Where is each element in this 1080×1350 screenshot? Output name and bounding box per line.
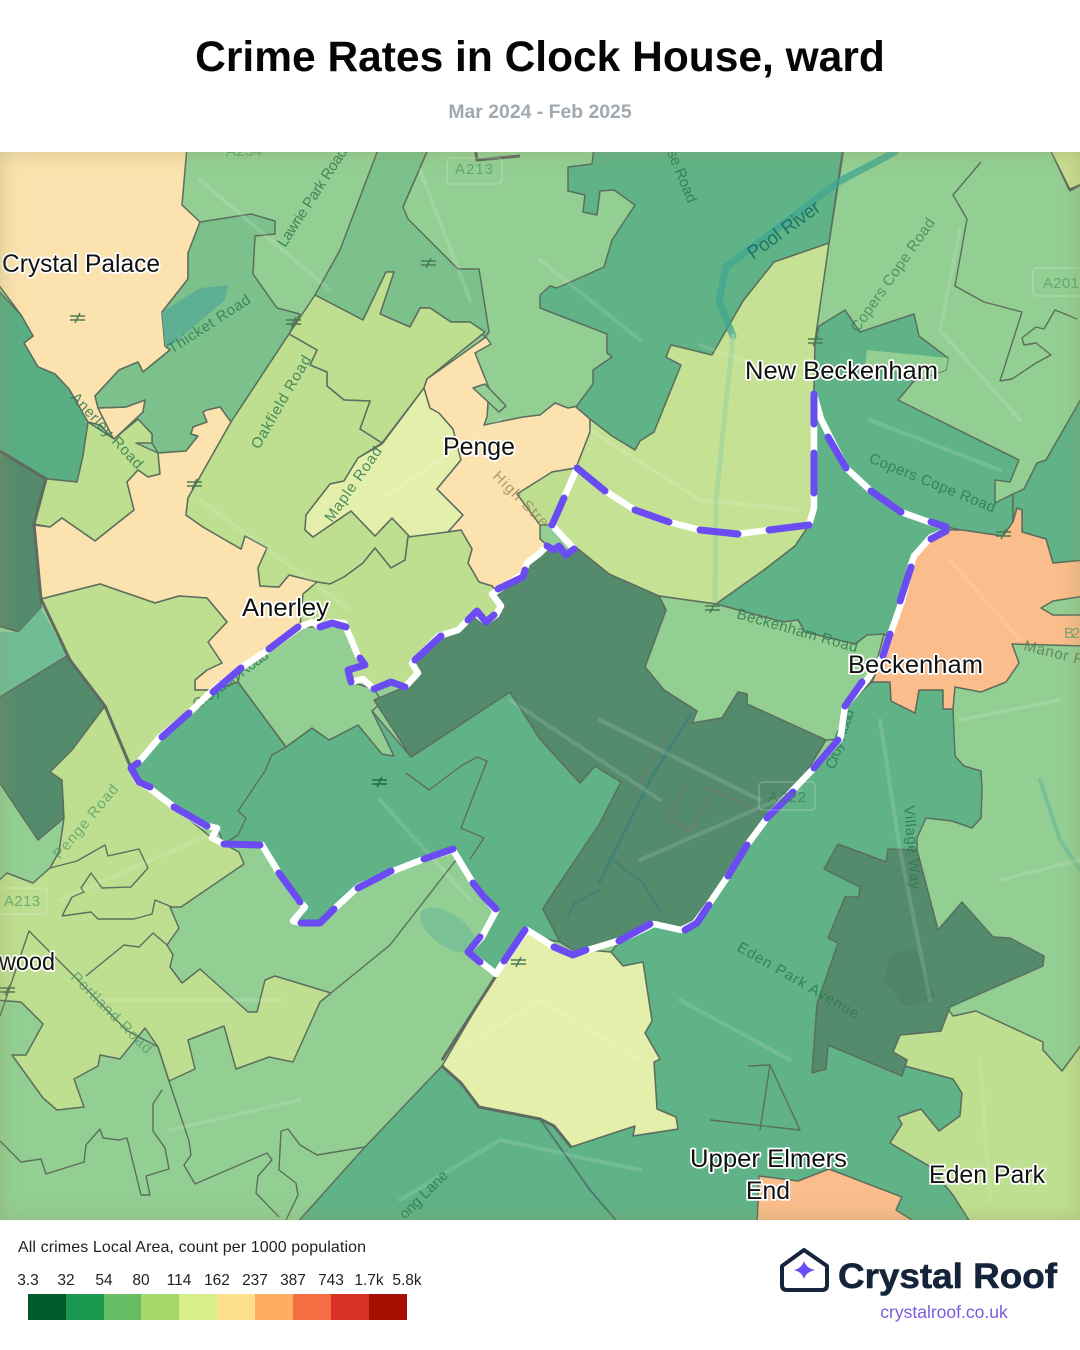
legend scale: 114	[167, 1272, 191, 1289]
shield and light road labels: B2	[1064, 625, 1080, 642]
logo: Crystal Roof: Crystal Roof	[838, 1257, 1057, 1296]
area: south-west of Anerley pale	[41, 584, 227, 768]
road labels: Pool River	[744, 197, 825, 264]
road labels: Beckenham Road	[735, 606, 860, 656]
place labels: Anerley	[242, 594, 330, 622]
area: Penge inlet	[473, 384, 506, 412]
road shields	[0, 158, 1080, 914]
legend scale: 32	[57, 1272, 75, 1289]
area: Eden Park darker patch	[884, 949, 936, 1007]
area: south-east medium	[295, 682, 982, 1225]
legend scale: 743	[318, 1272, 344, 1289]
road labels under ward line: Croydon Road	[189, 647, 272, 713]
road labels: Oakfield Road	[248, 353, 315, 452]
subtitle: date range: Mar 2024 - Feb 2025	[448, 101, 632, 123]
place labels: wood	[0, 948, 55, 976]
place labels: Penge	[443, 433, 515, 461]
shield and light road labels: A201	[1043, 275, 1079, 292]
choropleth map	[0, 152, 1080, 1220]
area: Oakfield block	[289, 272, 485, 443]
legend scale: 3.3	[17, 1272, 39, 1289]
legend scale: 54	[95, 1272, 113, 1289]
ward boundary	[131, 394, 946, 974]
area: Anerley Road pale	[34, 419, 160, 541]
place labels: Eden Park	[929, 1161, 1045, 1189]
area: ward base medium	[131, 682, 621, 974]
logo: Crystal Roof	[780, 1248, 1058, 1296]
water: Crystal Palace lake	[162, 285, 228, 346]
area: top medium	[315, 147, 489, 337]
road labels under ward line	[189, 647, 858, 771]
legend scale: 1.7k	[354, 1272, 384, 1289]
shield and light road labels	[4, 143, 1080, 1057]
legend scale: 162	[204, 1272, 230, 1289]
legend scale: 387	[280, 1272, 306, 1289]
road labels: Eden Park Avenue	[734, 939, 862, 1022]
area: Beckenham orange	[872, 508, 1080, 713]
area: west teal	[0, 608, 67, 700]
area: Anerley cream	[34, 407, 317, 690]
place labels: Crystal Palace	[2, 250, 160, 278]
road labels: Village Way	[900, 805, 924, 891]
area: west dark	[0, 656, 105, 840]
shield and light road labels: Penge Road	[50, 781, 122, 863]
area: Oakfield lower block	[186, 334, 410, 587]
top-right corner area	[1052, 152, 1080, 188]
area: Copers Cope inlet	[865, 350, 948, 381]
road labels under ward line: Croy Road	[823, 707, 858, 771]
website url: crystalroof.co.uk	[880, 1302, 1008, 1322]
shield and light road labels: A213	[455, 161, 493, 178]
place labels: Beckenham	[848, 651, 983, 679]
place labels	[0, 250, 1045, 1205]
area: ward north-east triangle	[716, 394, 946, 644]
area: Copers Cope medium	[814, 310, 1019, 536]
area: south-east pale	[890, 1009, 1080, 1225]
area: ward south light block	[645, 596, 884, 740]
legend scale: 80	[132, 1272, 150, 1289]
title: Crime Rates in Clock House, ward	[195, 34, 885, 81]
area: Thicket Road	[95, 214, 300, 453]
area: west medium	[0, 287, 88, 482]
area: ward dark high-crime area	[374, 546, 826, 950]
road labels: Copers Cope Road	[867, 450, 998, 516]
area: far-east medium	[1013, 392, 1080, 563]
boundary: purple dashes	[131, 394, 946, 962]
area: High Street pale corner	[517, 468, 576, 525]
area: west pale	[0, 706, 331, 1110]
area: south pale yellow	[442, 930, 678, 1147]
lake in park	[413, 899, 483, 961]
legend scale: 5.8k	[392, 1272, 422, 1289]
shield and light road labels: Portland Road	[67, 969, 156, 1057]
area: Upper Elmers End orange	[757, 1169, 920, 1225]
shield and light road labels: A213	[4, 893, 40, 910]
area: Penge cream	[424, 337, 590, 591]
road labels: High Stre	[489, 468, 552, 531]
area: Eden Park dark	[812, 844, 1044, 1076]
road labels: Copers Cope Road	[847, 215, 939, 335]
area: west dark strip	[0, 448, 46, 632]
area: top-centre medium	[540, 147, 844, 450]
legend title: All crimes Local Area, count per 1000 population	[18, 1239, 366, 1256]
area: ward light block	[238, 623, 394, 756]
area: Maple Road pale yellow	[305, 388, 463, 537]
road labels: Maple Road	[321, 443, 386, 525]
shield and light road labels: A222	[768, 789, 806, 806]
place labels: Upper Elmers	[690, 1145, 847, 1173]
river and road texture	[60, 152, 1080, 1200]
boundary detail lines	[0, 147, 1077, 1220]
legend scale: 237	[242, 1272, 268, 1289]
place labels: New Beckenham	[745, 357, 938, 385]
legend scale	[17, 1272, 422, 1320]
place labels: End	[746, 1177, 790, 1205]
boundary: white line	[131, 394, 946, 974]
road labels: Anerley Road	[67, 389, 146, 472]
area: Crystal Palace	[0, 147, 200, 440]
area: south Penge pale	[300, 530, 501, 689]
thick boundary lines	[0, 147, 1080, 1225]
road labels: Thicket Road	[165, 291, 254, 357]
area: New Beckenham pale	[552, 243, 829, 604]
road labels	[67, 144, 1080, 1223]
railway station icons	[0, 258, 1011, 995]
